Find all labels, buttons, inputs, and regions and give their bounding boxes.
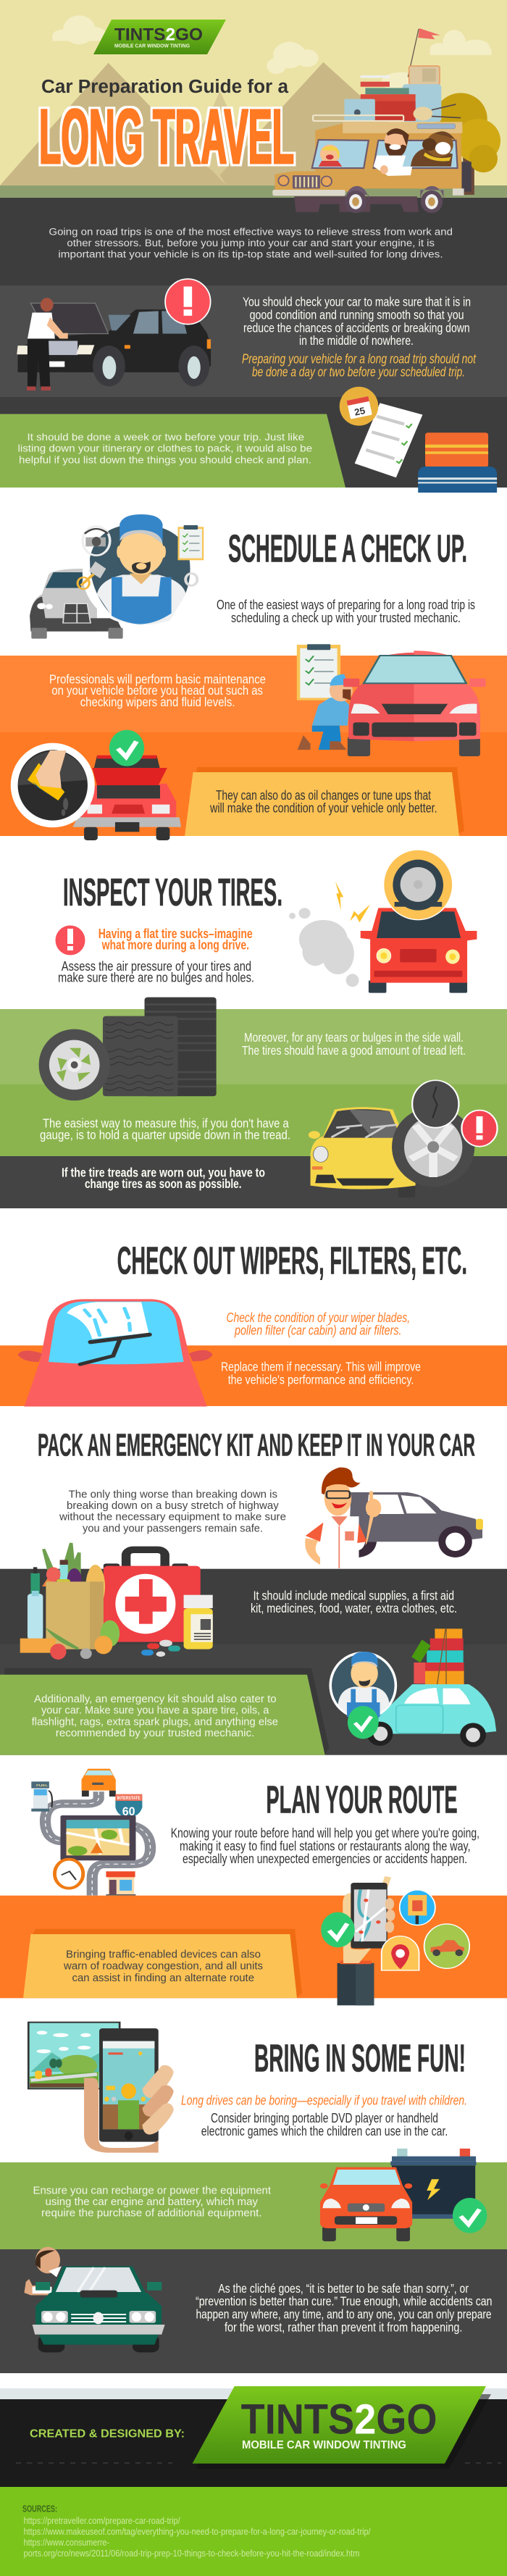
illustration: route map: 60 bbox=[122, 1805, 135, 1818]
text block: breaking down bbox=[59, 1489, 286, 1534]
icon: wrench and gear bbox=[77, 561, 197, 589]
text block: professionals: checking wipers and fluid levels. bbox=[80, 695, 235, 709]
text block: introduction bbox=[49, 226, 453, 260]
illustration: tire stack bbox=[39, 998, 217, 1100]
panel: car supplies bbox=[0, 1668, 329, 1755]
text block: introduction: Going on road trips is one of the most effective ways to relieve stress from work and bbox=[49, 226, 453, 237]
text block: worn treads: If the tire treads are worn out, you have to bbox=[62, 1165, 265, 1179]
illustration: driver in green car bbox=[24, 2247, 165, 2352]
text block: dvd player: Consider bringing portable DVD player or handheld bbox=[211, 2111, 438, 2125]
callout: wiper condition bbox=[226, 1310, 410, 1338]
text block: worn treads bbox=[62, 1165, 265, 1191]
callout: oil changes: They can also do as oil changes or tune ups that bbox=[216, 788, 431, 803]
illustration: mechanic at red car bbox=[297, 644, 485, 756]
silver car bbox=[30, 569, 123, 639]
text block: kit contents: It should include medical supplies, a first aid bbox=[254, 1588, 454, 1602]
text block: quarter test: The easiest way to measure this, if you don't have a bbox=[43, 1116, 289, 1131]
icon: alert bbox=[165, 279, 211, 325]
text block: professionals: on your vehicle before you head out such as bbox=[51, 683, 263, 698]
text block: quarter test: gauge, is to hold a quarter upside down in the tread. bbox=[40, 1127, 290, 1142]
icon: clipboard bbox=[178, 525, 204, 560]
panel: sources: https://pretraveller.com/prepare-car-road-trip/ bbox=[24, 2516, 180, 2526]
panel: green recharge: Ensure you can recharge or power the equipment bbox=[33, 2184, 272, 2196]
icon: alert bbox=[461, 1111, 498, 1147]
text block: dvd player bbox=[201, 2111, 448, 2138]
illustration: route map: FUEL bbox=[36, 1784, 49, 1788]
panel: green recharge: using the car engine and battery, which may bbox=[45, 2196, 259, 2208]
mountains bbox=[0, 62, 459, 185]
panel: sources: ports.org/cro/news/2011/06/road-trip-prep-10-things-to-check-before-you-hit-the-road/index.htm bbox=[24, 2548, 359, 2559]
callout: traffic devices: warn of roadway congestion, and all units bbox=[63, 1960, 263, 1972]
panel: car supplies: Additionally, an emergency kit should also cater to bbox=[34, 1694, 277, 1705]
callout: oil changes: will make the condition of your vehicle only better. bbox=[209, 801, 437, 816]
icon: alert bbox=[55, 926, 85, 955]
illustration: broken down red car bbox=[289, 850, 477, 993]
panel: green tire tread bbox=[0, 998, 507, 1208]
text block: route planning bbox=[171, 1826, 479, 1866]
panel: car supplies: flashlight, rags, extra spark plugs, and anything else bbox=[32, 1716, 278, 1728]
illustration: mechanic at black car bbox=[17, 298, 211, 390]
text block: conclusion bbox=[196, 2281, 493, 2334]
car bbox=[361, 908, 477, 993]
logo: TINTS2GO bbox=[114, 25, 203, 45]
footer logo bbox=[193, 2386, 491, 2469]
panel: list things to check: It should be done a week or two before your trip. Just like bbox=[28, 431, 304, 443]
text block: check your car: good condition and running smooth so that you bbox=[250, 308, 464, 322]
lightning bbox=[335, 882, 370, 922]
callout: flat tire: what more during a long drive. bbox=[101, 938, 249, 953]
panel: orange wipers bbox=[0, 1345, 507, 1406]
panel: dark emergency kit bbox=[0, 1543, 507, 1755]
illustration: attendant and gray car bbox=[305, 1468, 483, 1568]
panel: orange maintenance bbox=[0, 644, 507, 840]
illustration: tablet and phone games bbox=[28, 2023, 174, 2153]
text block: worn treads: change tires as soon as possible. bbox=[85, 1176, 242, 1191]
icon: flat tire bbox=[383, 850, 453, 920]
title: Car Preparation Guide for a bbox=[41, 77, 289, 97]
callout: wiper condition: Check the condition of your wiper blades, bbox=[226, 1310, 410, 1325]
illustration: loaded teal car and mechanic bbox=[329, 1628, 496, 1747]
panel: sources: https://www.makeuseof.com/tag/everything-you-need-to-prepare-for-a-long-car-journey-or-road-trip/ bbox=[24, 2527, 371, 2537]
text block: assess tires: Assess the air pressure of your tires and bbox=[62, 959, 251, 974]
hero clouds bbox=[52, 15, 492, 91]
flag bbox=[408, 28, 440, 77]
text block: assess tires: make sure there are no bulges and holes. bbox=[58, 971, 254, 985]
panel: list things to check: helpful if you list down the things you should check and plan. bbox=[19, 454, 311, 466]
illustration: windshield wiper bbox=[18, 1299, 213, 1407]
icon: steering wheel bbox=[83, 527, 110, 556]
trees bbox=[435, 93, 500, 195]
panel: sources bbox=[0, 2487, 507, 2576]
panel: sources: SOURCES: bbox=[22, 2504, 57, 2514]
panel: list things to check: listing down your itinerary or clothes to pack, it would also be bbox=[17, 443, 312, 454]
jeep body bbox=[272, 122, 472, 213]
panel: orange wipers: the vehicle's performance and efficiency. bbox=[228, 1373, 414, 1387]
panel: green recharge: require the purchase of additional equipment. bbox=[41, 2207, 262, 2220]
text block: breaking down: without the necessary equipment to make sure bbox=[59, 1512, 286, 1523]
panel: list things to check bbox=[0, 414, 345, 488]
text block: kit contents bbox=[251, 1588, 457, 1615]
panel: green recharge bbox=[0, 2162, 507, 2249]
panel: check your car bbox=[0, 279, 507, 493]
panel: orange wipers: Replace them if necessary. This will improve bbox=[221, 1360, 421, 1374]
illustration: route map: INTERSTATE bbox=[117, 1795, 141, 1801]
panel: sources: https://www.consumerre- bbox=[24, 2538, 109, 2548]
callout: timing note bbox=[242, 352, 477, 380]
smoke bbox=[289, 908, 359, 987]
panel: hero bbox=[0, 0, 507, 285]
text block: introduction: important that your vehicle is on its tip-top state and well-suited for long drives. bbox=[58, 249, 443, 260]
text block: breaking down: The only thing worse than breaking down is bbox=[69, 1489, 277, 1500]
logo bbox=[93, 20, 226, 54]
illustration: mechanic and silver car bbox=[30, 514, 204, 639]
text block: schedule intro bbox=[217, 598, 475, 625]
footer logo: MOBILE CAR WINDOW TINTING bbox=[242, 2439, 406, 2451]
text block: breaking down: breaking down on a busy stretch of highway bbox=[67, 1500, 280, 1512]
callout: traffic devices: Bringing traffic-enabled devices can also bbox=[66, 1949, 261, 1961]
callout: wiper condition: pollen filter (car cabin) and air filters. bbox=[234, 1323, 401, 1338]
callout: flat tire: Having a flat tire sucks–imagine bbox=[99, 927, 253, 941]
text block: assess tires bbox=[58, 959, 254, 985]
illustration: oil change and open hood car bbox=[11, 730, 181, 840]
footer logo: TINTS2GO bbox=[241, 2396, 437, 2443]
illustration: battery and orange car bbox=[320, 2149, 487, 2241]
text block: introduction: other stressors. But, before you jump into your car and start your engine, it is bbox=[67, 238, 435, 248]
logo: MOBILE CAR WINDOW TINTING bbox=[114, 43, 190, 49]
callout: oil changes bbox=[185, 767, 464, 836]
mechanic portrait bbox=[83, 514, 190, 625]
text block: conclusion: for the worst, rather than prevent it from happening. bbox=[225, 2320, 462, 2334]
panel: orange traffic devices bbox=[0, 1876, 507, 2005]
panel: car supplies: recommended by your trusted mechanic. bbox=[56, 1728, 254, 1739]
callout: traffic devices bbox=[23, 1929, 302, 1998]
luggage bbox=[313, 66, 461, 122]
text block: professionals: Professionals will perform basic maintenance bbox=[49, 672, 266, 686]
illustration: phone navigation and icons bbox=[321, 1876, 469, 2005]
text block: quarter test bbox=[40, 1116, 290, 1142]
panel: conclusion bbox=[0, 2247, 507, 2373]
driver, passenger and dog bbox=[319, 128, 456, 176]
illustration: checklist and suitcases: 25 bbox=[353, 405, 366, 418]
text block: professionals bbox=[49, 672, 266, 709]
text block: check your car: in the middle of nowhere. bbox=[299, 333, 414, 348]
panel: car supplies: your car. Make sure you have a spare tire, oils, a bbox=[41, 1705, 269, 1717]
text block: check your car bbox=[243, 294, 471, 348]
illustration: first aid kit and food bbox=[20, 1543, 213, 1660]
illustration: route map bbox=[31, 1769, 151, 1896]
text block: breaking down: you and your passengers remain safe. bbox=[83, 1523, 263, 1534]
heading: inspect your tires: INSPECT YOUR TIRES. bbox=[63, 871, 282, 914]
icon: cracked tire bbox=[412, 1080, 458, 1128]
title bbox=[39, 77, 294, 180]
text block: side wall bbox=[242, 1030, 466, 1058]
illustration: road trip jeep bbox=[272, 28, 500, 213]
panel: footer credit bbox=[0, 2386, 507, 2487]
callout: flat tire bbox=[99, 927, 253, 953]
credit label: CREATED & DESIGNED BY: bbox=[30, 2427, 185, 2440]
callout: traffic devices: can assist in finding an alternate route bbox=[72, 1972, 254, 1984]
text block: kit contents: kit, medicines, food, water, extra clothes, etc. bbox=[251, 1601, 457, 1615]
illustration: checklist and suitcases bbox=[340, 387, 497, 493]
illustration: yellow car with worn tire bbox=[309, 1107, 474, 1197]
